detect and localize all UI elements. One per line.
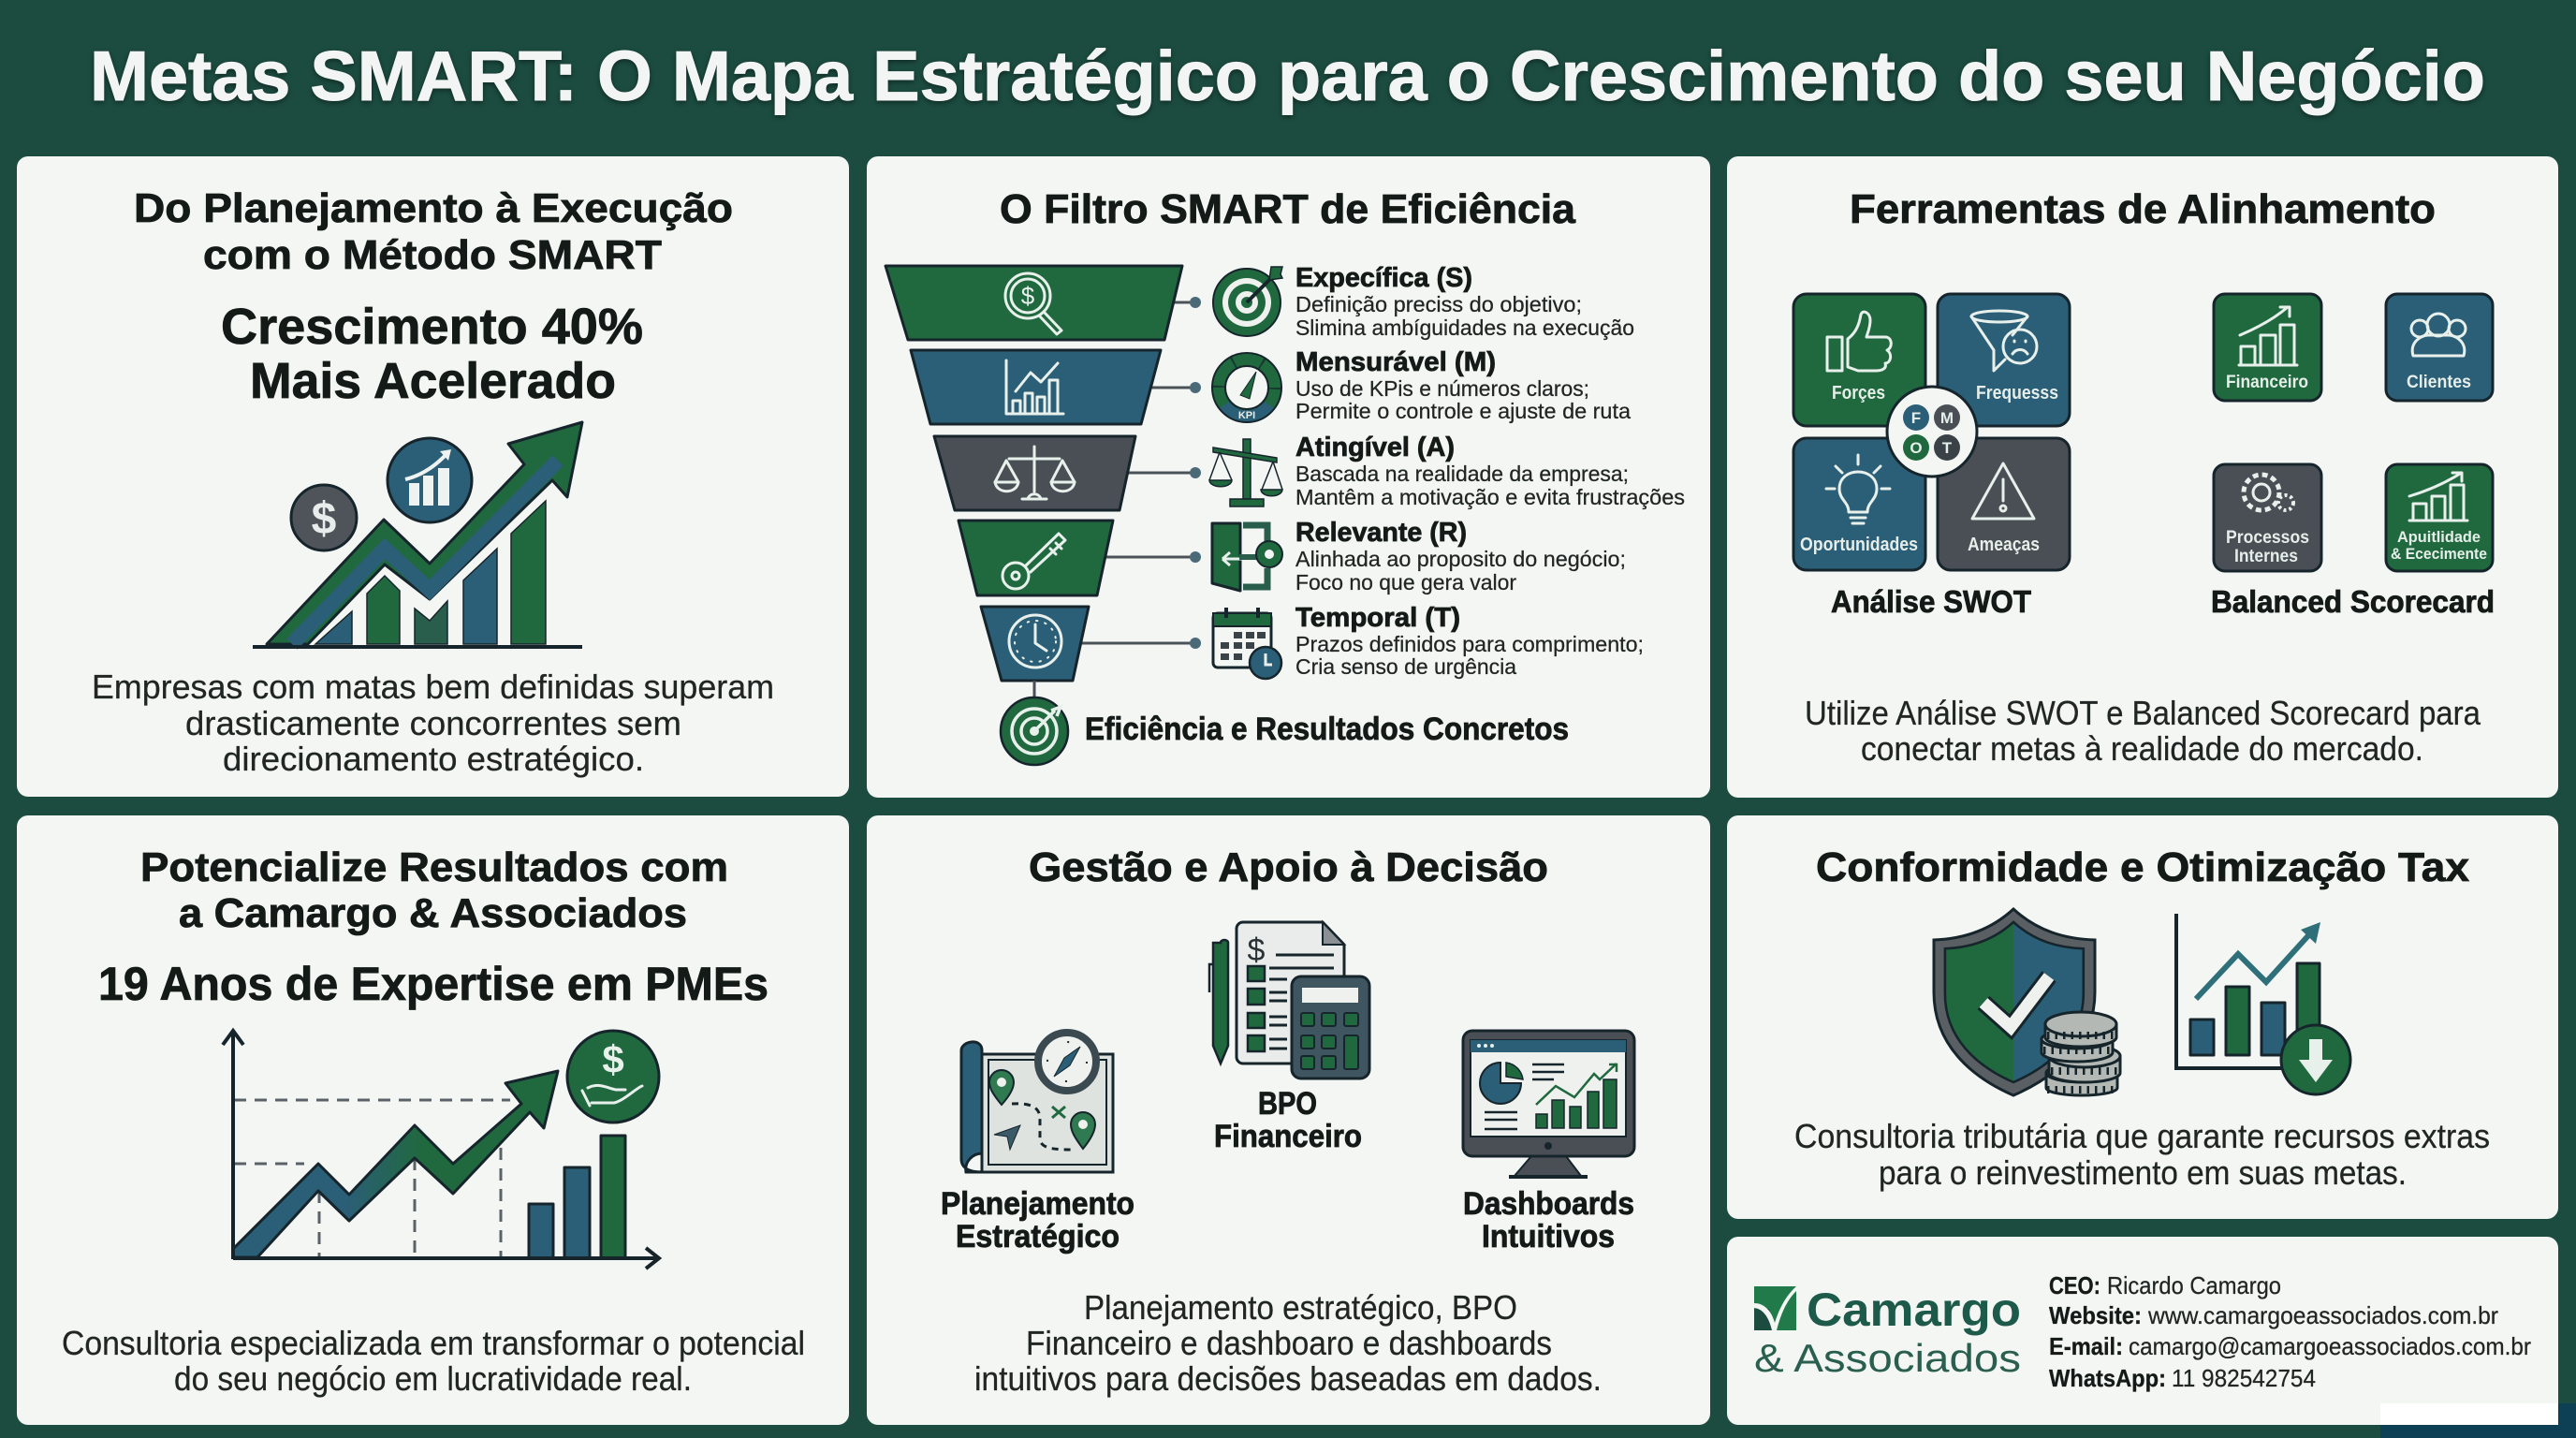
icon: magnifier with dollar — [1005, 273, 1061, 334]
contact details: 11 982542754 — [2172, 1364, 2316, 1392]
text: mensurável: Mensurável (M) — [1295, 347, 1496, 377]
swot centre badge: O — [1910, 439, 1923, 457]
body text — [1794, 1117, 2490, 1192]
label: planejamento estratégico — [941, 1186, 1134, 1255]
body text: intuitivos para decisões baseadas em dados. — [974, 1359, 1602, 1398]
panel: ferramentas de alinhamento — [1727, 156, 2558, 798]
label: análise swot: Análise SWOT — [1831, 584, 2031, 619]
title: Metas SMART: O Mapa Estratégico para o Crescimento do seu Negócio — [90, 37, 2485, 115]
body text: conectar metas à realidade do mercado. — [1861, 729, 2423, 768]
icon: tax chart with down arrow — [2176, 914, 2350, 1094]
body text: Consultoria especializada em transformar o potencial — [62, 1324, 805, 1362]
tile: aprendizado: Apuitlidade — [2397, 528, 2481, 546]
text: específica: Definição preciss do objetivo; — [1295, 292, 1582, 316]
panel: filtro smart — [867, 156, 1710, 798]
text: atingível: Bascada na realidade da empresa; — [1295, 462, 1629, 486]
tile: processos internos — [2214, 464, 2321, 571]
text: atingível: Mantêm a motivação e evita frustrações — [1295, 485, 1685, 509]
label: bpo financeiro — [1214, 1086, 1362, 1154]
body text: Consultoria tributária que garante recursos extras — [1794, 1117, 2490, 1155]
heading: a Camargo & Associados — [179, 890, 687, 936]
panel: camargo e associados — [17, 815, 849, 1425]
result label: Eficiência e Resultados Concretos — [1085, 712, 1569, 747]
text: relevante: Alinhada ao proposito do negócio; — [1295, 547, 1626, 571]
contact details: E-mail: — [2049, 1332, 2123, 1360]
body text — [974, 1288, 1602, 1398]
icon: key — [1003, 534, 1065, 589]
text: relevante: Foco no que gera valor — [1295, 570, 1516, 594]
logo: camargo e associados: Camargo — [1807, 1284, 2021, 1336]
heading: Conformidade e Otimização Tax — [1816, 844, 2470, 890]
icon: calendar and clock (temporal) — [1213, 608, 1281, 679]
stat: crescimento 40% — [221, 299, 643, 409]
icon: dashboard monitor — [1463, 1031, 1634, 1179]
icon: door and key (relevante) — [1212, 523, 1282, 591]
tile: fraquezas — [1938, 294, 2070, 426]
body text — [1805, 694, 2481, 768]
label: bpo financeiro: BPO — [1258, 1086, 1317, 1122]
icon: hand with dollar: $ — [602, 1037, 624, 1081]
contact details: CEO: — [2049, 1271, 2100, 1299]
corner patch — [2380, 1403, 2576, 1438]
icon: growth chart with arrow — [253, 422, 582, 649]
label: balanced scorecard: Balanced Scorecard — [2211, 584, 2495, 619]
icon: balance (atingível) — [1209, 439, 1282, 506]
tile: processos internos: Internes — [2234, 547, 2298, 566]
body text: para o reinvestimento em suas metas. — [1879, 1153, 2407, 1192]
body text: Empresas com matas bem definidas superam — [92, 668, 774, 706]
tile: aprendizado: & Ececimente — [2391, 545, 2487, 563]
body text: Utilize Análise SWOT e Balanced Scorecard para — [1805, 694, 2481, 732]
text: mensurável — [1295, 347, 1631, 423]
tile: financeiro: Financeiro — [2226, 373, 2308, 392]
swot matrix — [1793, 294, 2070, 570]
swot centre badge — [1887, 387, 1977, 477]
logo: camargo e associados — [1754, 1284, 2021, 1380]
tile: forças — [1793, 294, 1925, 426]
text: temporal: Cria senso de urgência — [1295, 654, 1516, 679]
icon: bar chart — [1006, 360, 1063, 414]
icon: scales — [995, 447, 1075, 499]
body text — [92, 668, 774, 778]
icon: growth chart with arrow: $ — [312, 494, 337, 544]
balanced scorecard tiles — [2214, 294, 2493, 571]
text: específica: Slimina ambíguidades na execução — [1295, 315, 1634, 340]
tile: aprendizado — [2386, 464, 2493, 571]
text: específica — [1295, 263, 1634, 340]
connector to result — [1033, 681, 1035, 702]
heading — [140, 844, 728, 936]
swot centre badge: T — [1942, 439, 1953, 457]
tile: ameaças: Ameaças — [1968, 535, 2040, 555]
body text: Planejamento estratégico, BPO — [1084, 1288, 1517, 1327]
text: mensurável: Uso de KPis e números claros; — [1295, 376, 1589, 401]
contact details: Website: — [2049, 1301, 2142, 1329]
icon: gauge (mensurável) — [1212, 353, 1281, 422]
tile: oportunidades — [1793, 438, 1925, 570]
logo: camargo e associados: & Associados — [1754, 1336, 2021, 1380]
text: temporal: Temporal (T) — [1295, 603, 1460, 633]
icon: shield with coins — [1934, 909, 2120, 1095]
stat: crescimento 40%: Mais Acelerado — [250, 353, 616, 409]
text: atingível: Atingível (A) — [1295, 433, 1455, 462]
icon: gauge (mensurável): KPI — [1238, 410, 1255, 421]
icon: document, pen and calculator: $ — [1248, 932, 1266, 968]
panel: conformidade e otimização tax — [1727, 815, 2558, 1219]
tile: clientes: Clientes — [2407, 373, 2471, 392]
label: dashboards intuitivos: Dashboards — [1463, 1186, 1634, 1222]
contact details: Ricardo Camargo — [2107, 1271, 2281, 1299]
icon: document, pen and calculator — [1209, 922, 1369, 1078]
swot centre badge: M — [1940, 409, 1954, 427]
label: planejamento estratégico: Estratégico — [956, 1219, 1120, 1255]
panel: contact footer — [1727, 1237, 2558, 1425]
icon: map and compass — [961, 1033, 1113, 1172]
contact details — [2049, 1271, 2531, 1392]
label: bpo financeiro: Financeiro — [1214, 1119, 1362, 1154]
icon: target (específica) — [1213, 267, 1282, 336]
funnel — [886, 266, 1201, 702]
contact details: www.camargoeassociados.com.br — [2147, 1301, 2498, 1329]
body text: Financeiro e dashboaro e dashboards — [1026, 1324, 1552, 1362]
line and bar chart — [223, 1031, 659, 1269]
heading: Do Planejamento à Execução — [134, 185, 733, 231]
stat: crescimento 40%: Crescimento 40% — [221, 299, 643, 355]
heading: Gestão e Apoio à Decisão — [1029, 844, 1548, 890]
heading — [134, 185, 733, 278]
tile: forças: Forçes — [1832, 383, 1885, 404]
icon: magnifier with dollar: $ — [1021, 282, 1035, 310]
stat: 19 anos: 19 Anos de Expertise em PMEs — [98, 958, 768, 1010]
body text: drasticamente concorrentes sem — [185, 704, 681, 742]
panel: gestão e apoio à decisão — [867, 815, 1710, 1425]
body text: direcionamento estratégico. — [223, 740, 644, 778]
label: dashboards intuitivos: Intuitivos — [1482, 1219, 1615, 1255]
text: temporal — [1295, 603, 1644, 679]
panel: do planejamento à execução — [17, 156, 849, 797]
heading: Ferramentas de Alinhamento — [1850, 186, 2436, 232]
text: mensurável: Permite o controle e ajuste de ruta — [1295, 399, 1631, 423]
icon: hand with dollar — [567, 1031, 659, 1123]
icon: result target — [1001, 697, 1068, 765]
label: dashboards intuitivos — [1463, 1186, 1634, 1255]
heading: O Filtro SMART de Eficiência — [1000, 186, 1576, 232]
label: planejamento estratégico: Planejamento — [941, 1186, 1134, 1222]
text: atingível — [1295, 433, 1685, 509]
body text: do seu negócio em lucratividade real. — [174, 1359, 692, 1398]
tile: fraquezas: Frequesss — [1976, 383, 2058, 404]
tile: ameaças — [1938, 438, 2070, 570]
contact details: WhatsApp: — [2049, 1364, 2166, 1392]
contact details: camargo@camargoeassociados.com.br — [2129, 1332, 2531, 1360]
tile: financeiro — [2214, 294, 2321, 401]
text: temporal: Prazos definidos para comprimento; — [1295, 632, 1644, 656]
heading: com o Método SMART — [203, 232, 662, 278]
text: relevante — [1295, 518, 1626, 594]
body text — [62, 1324, 805, 1398]
tile: oportunidades: Oportunidades — [1800, 535, 1918, 555]
icon: clock — [1009, 615, 1061, 668]
text: específica: Expecífica (S) — [1295, 263, 1472, 293]
swot centre badge: F — [1911, 409, 1921, 427]
tile: clientes — [2386, 294, 2493, 401]
tile: processos internos: Processos — [2226, 528, 2309, 548]
text: relevante: Relevante (R) — [1295, 518, 1467, 548]
heading: Potencialize Resultados com — [140, 844, 728, 890]
